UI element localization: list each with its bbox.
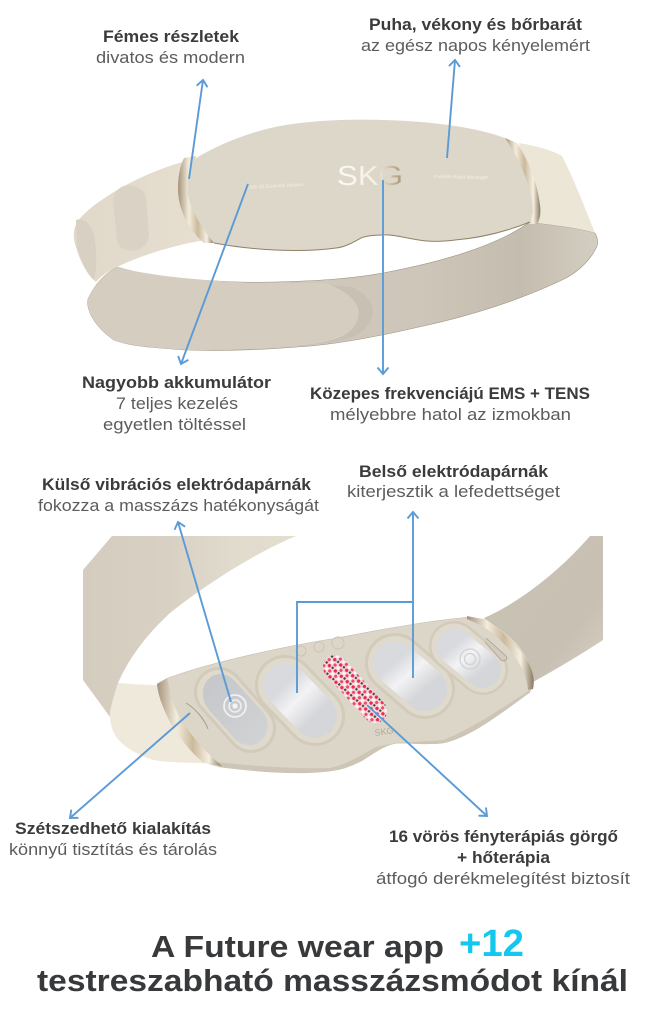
bottom product: inner side of the belt	[83, 536, 603, 773]
electrode pad: inner left	[285, 685, 315, 716]
lower body shade	[210, 690, 530, 773]
small pad print left: EMS 95 Evolved Version	[246, 182, 304, 191]
label: metal details: Fémes részletek	[103, 28, 240, 46]
label: battery	[82, 374, 272, 434]
left metal trim	[178, 156, 214, 243]
label: inner electrode pads: kiterjesztik a lefedettséget	[347, 483, 560, 501]
arrow: outer vibrating pad	[178, 522, 231, 702]
label: EMS + TENS	[310, 385, 590, 424]
label: red light therapy: + hőterápia	[457, 849, 551, 867]
left outer strap	[74, 160, 205, 282]
label: soft material: az egész napos kényelemért	[361, 37, 590, 55]
label: detachable design: könnyű tisztítás és tárolás	[9, 841, 217, 859]
closing heading: A Future wear app	[151, 929, 444, 964]
left strap inner face	[83, 536, 296, 717]
belt interior band	[88, 222, 598, 350]
arrow: red light therapy	[367, 705, 487, 816]
closing heading	[37, 923, 628, 998]
label: metal details: divatos és modern	[96, 49, 245, 67]
label: outer vibrating pad: Külső vibrációs elektródapárnák	[42, 476, 312, 494]
pad lower edge shadow	[214, 222, 530, 251]
label: inner electrode pads: Belső elektródapárnák	[359, 463, 549, 481]
label: EMS + TENS: mélyebbre hatol az izmokban	[330, 406, 571, 424]
detach latch right	[485, 638, 507, 661]
label: detachable design: Szétszedhető kialakítás	[15, 820, 211, 838]
arrow: detachable design	[70, 713, 190, 818]
detach latch left	[186, 703, 208, 729]
label: battery: egyetlen töltéssel	[103, 416, 246, 434]
label: soft material	[361, 16, 590, 55]
main pad	[188, 120, 533, 251]
red light therapy strip	[335, 667, 375, 711]
electrode pad: vibrating left	[203, 674, 268, 745]
label: soft material: Puha, vékony és bőrbarát	[369, 16, 583, 34]
arrow: metal details	[189, 80, 203, 179]
label: metal details	[96, 28, 245, 67]
label: inner electrode pads	[347, 463, 560, 501]
small pad print right: Invisible Waist Massager	[434, 174, 488, 181]
label: red light therapy: átfogó derékmelegítést biztosít	[376, 870, 630, 888]
buttons on top edge	[296, 637, 344, 656]
printed SKG: SKG	[374, 725, 394, 738]
left metal trim	[157, 678, 222, 766]
electrode pad: inner right	[395, 663, 425, 689]
SKG logo: SKG	[337, 160, 403, 191]
right metal trim	[467, 616, 534, 690]
label: outer vibrating pad	[38, 476, 319, 515]
label: red light therapy	[376, 828, 630, 888]
right metal trim	[505, 138, 540, 224]
velcro pad on strap	[113, 185, 149, 251]
label: EMS + TENS: Közepes frekvenciájú EMS + TENS	[310, 385, 590, 403]
arrow: inner electrode pads	[297, 512, 413, 693]
right outer strap	[519, 143, 595, 233]
arrow: soft material	[447, 60, 455, 158]
label: battery: 7 teljes kezelés	[116, 395, 238, 413]
left strap front part	[110, 683, 205, 763]
overlap tab on the inside of the band	[290, 282, 373, 347]
closing heading: +12	[459, 923, 524, 965]
label: red light therapy: 16 vörös fényterápiás görgő	[389, 828, 618, 846]
arrow: battery	[181, 184, 248, 364]
right strap	[484, 536, 603, 682]
electrode pad: vibrating right	[454, 646, 483, 670]
second velcro pad	[76, 219, 96, 280]
label: battery: Nagyobb akkumulátor	[82, 374, 272, 392]
label: detachable design	[9, 820, 217, 859]
label: outer vibrating pad: fokozza a masszázs hatékonyságát	[38, 497, 319, 515]
top product: massage belt, pad side out	[74, 120, 598, 350]
arrow: EMS + TENS	[382, 180, 384, 374]
control unit body	[157, 617, 533, 773]
closing heading: testreszabható masszázsmódot kínál	[37, 963, 628, 998]
